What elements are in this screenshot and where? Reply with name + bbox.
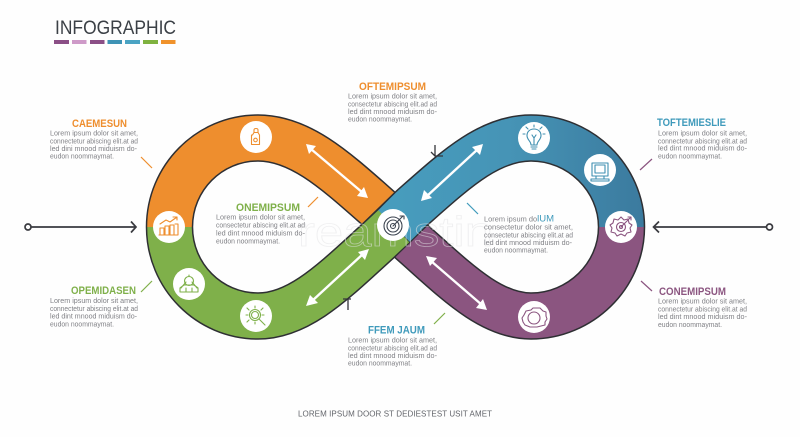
text block: oftemipsum: OFTEMIPSUM xyxy=(359,81,426,93)
text block: toftemieslie: connectetur abiscing elit.at ad xyxy=(658,138,747,146)
connector: caemesun xyxy=(141,157,152,168)
connector: opemidasen xyxy=(141,281,152,292)
icon: gear with magnifier xyxy=(240,300,272,332)
text block: caemesun: CAEMESUN xyxy=(72,118,127,130)
text block: conemipsum: eudon noommaymat. xyxy=(658,322,722,329)
right input arrow xyxy=(654,222,772,232)
text block: opemidasen xyxy=(50,285,138,328)
icon: gear with target xyxy=(605,211,637,243)
text block: conemipsum: connectetur abiscing elit.at ad xyxy=(658,306,747,314)
text block: caemesun xyxy=(50,118,138,160)
text block: onemipsum: eudon noommaymat. xyxy=(216,238,280,246)
text block: oftemipsum: led dint mnood miduism do- xyxy=(348,109,438,116)
text block: toftemieslie: TOFTEMIESLIE xyxy=(657,117,726,129)
dark marker on green band xyxy=(343,299,351,310)
arrow: purple double-headed xyxy=(426,256,487,310)
icon: camera ring xyxy=(518,301,550,333)
connector: ffem jaum xyxy=(434,313,445,324)
text block: centre right: eudon noommaymat. xyxy=(484,248,548,254)
footer caption: LOREM IPSUM DOOR ST DEDIESTEST USIT AMET xyxy=(298,410,492,418)
text block: conemipsum xyxy=(658,286,748,329)
text block: oftemipsum: consectetur abiscing elit.ad ad xyxy=(348,102,437,108)
text block: toftemieslie: eudon noommaymat. xyxy=(658,154,722,160)
text block: toftemieslie xyxy=(657,117,748,160)
connector: toftemieslie xyxy=(640,159,652,170)
icon: monitor xyxy=(584,154,616,186)
text block: onemipsum: ONEMIPSUM xyxy=(236,202,300,214)
icon: light bulb xyxy=(518,122,550,154)
icon: target in centre xyxy=(377,209,409,241)
band: orange and purple xyxy=(170,138,622,316)
text block: onemipsum: led dint mnood miduism do- xyxy=(216,230,306,238)
text block: centre right xyxy=(484,214,573,254)
connector: centre right text xyxy=(467,203,478,214)
text block: caemesun: Lorem ipsum dolor sit amet, xyxy=(50,130,138,138)
arrow: orange double-headed xyxy=(306,144,368,198)
text block: onemipsum: consectetur abiscing elit.at ad xyxy=(216,222,305,230)
text block: opemidasen: connectetur abiscing elit.at ad xyxy=(50,306,138,313)
left input arrow xyxy=(25,222,136,232)
text block: caemesun: eudon noommaymat. xyxy=(50,154,114,160)
text block: onemipsum: Lorem ipsum dolor sit amet, xyxy=(216,214,305,222)
text block: conemipsum: led dint mnood miduism do- xyxy=(658,314,748,321)
text block: conemipsum: Lorem ipsum dolor sit amet, xyxy=(658,298,747,306)
infinity ribbon xyxy=(170,138,622,316)
text block: oftemipsum: Lorem ipsum dolor sit amet, xyxy=(348,94,437,100)
arrow: blue double-headed xyxy=(421,144,483,201)
icon: bottle xyxy=(240,121,272,153)
connector: onemipsum xyxy=(308,197,318,207)
text block: caemesun: connectetur abiscing elit.at ad xyxy=(50,138,138,146)
dark marker on blue band xyxy=(431,145,443,156)
text block: ffem jaum xyxy=(348,324,438,368)
text block: ffem jaum: Lorem ipsum dolor sit amet, xyxy=(348,338,437,344)
icon: people group xyxy=(173,268,205,300)
text block: ffem jaum: eudon noommaymat. xyxy=(348,360,412,368)
text block: ffem jaum: connectetur abiscing elit.ad ad xyxy=(348,346,437,352)
text block: oftemipsum: eudon noommaymat. xyxy=(348,116,412,124)
band: green and blue xyxy=(170,138,622,316)
text block: opemidasen: led dint mnood miduism do- xyxy=(50,314,138,320)
text block: opemidasen: OPEMIDASEN xyxy=(71,285,136,297)
text block: caemesun: led dini mnood miduism do- xyxy=(50,146,138,153)
text block: opemidasen: eudon noommaymat. xyxy=(50,322,114,328)
text block: onemipsum xyxy=(216,202,306,246)
text block: opemidasen: Lorem ipsum dolor sit amet, xyxy=(50,298,138,305)
text block: toftemieslie: Lorem ipsum dolor sit amet, xyxy=(658,130,747,138)
title: INFOGRAPHIC xyxy=(55,18,176,39)
icon: growth chart xyxy=(153,211,185,243)
text block: conemipsum: CONEMIPSUM xyxy=(659,286,726,298)
text block: ffem jaum: led dint mnood miduism do- xyxy=(348,353,438,360)
arrow: green double-headed xyxy=(306,249,369,306)
text block: centre right: consectetur abiscing elit.at ad xyxy=(484,232,573,240)
text block: ffem jaum: FFEM JAUM xyxy=(368,324,425,336)
text block: centre right: led dint mnood miduism do- xyxy=(484,240,573,247)
title colour bars xyxy=(54,40,176,44)
text block: toftemieslie: led dint mnood miduism do- xyxy=(658,146,748,152)
text block: oftemipsum xyxy=(348,81,438,124)
faint watermark: reamstin xyxy=(298,208,493,255)
text block: centre right: Lorem ipsum do lUM xyxy=(484,214,554,224)
connector: conemipsum xyxy=(641,281,652,291)
text block: centre right: consectetur dolor sit amet, xyxy=(484,224,573,232)
